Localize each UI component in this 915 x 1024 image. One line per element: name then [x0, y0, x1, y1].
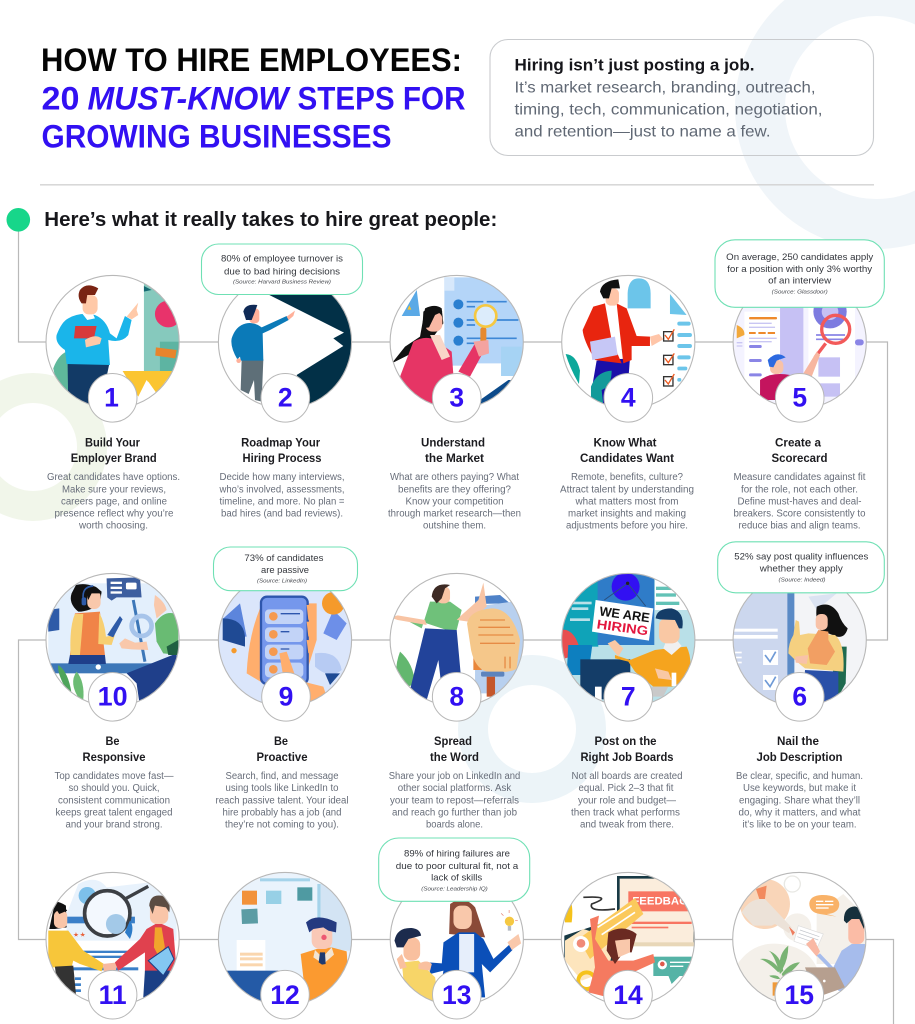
number badge: 8: [449, 682, 464, 712]
step description: reach passive talent. Your ideal: [216, 796, 348, 806]
step description: what matters most from: [574, 496, 678, 508]
step 3 panel: [388, 273, 525, 532]
callout: candidates per position: of an interview: [768, 276, 831, 286]
illustration: hand holding phone of candidates: [219, 591, 351, 702]
step description: bad hires (and bad reviews).: [221, 508, 343, 520]
illustration: we are hiring sign: HIRING: [596, 616, 649, 638]
step 10 panel: [43, 572, 183, 830]
title: 20: [42, 80, 80, 116]
step description: [47, 472, 180, 532]
number badge: [432, 672, 481, 721]
step 2 panel: [202, 244, 362, 520]
step description: Measure candidates against fit: [734, 472, 866, 483]
illustration: man at sticky note board: [219, 873, 351, 1000]
number badge: 3: [449, 382, 464, 412]
step description: it’s like to be on your team.: [742, 820, 856, 830]
step description: [54, 771, 174, 830]
section heading: Here’s what it really takes to hire great people:: [44, 209, 497, 231]
step description: Know your competition: [406, 496, 504, 508]
step description: [571, 771, 682, 830]
step description: equal. Pick 2–3 that fit: [578, 783, 674, 794]
number badge: 6: [792, 682, 807, 712]
callout: candidates per position: [715, 240, 884, 307]
step 11 panel: [43, 871, 183, 1019]
callout: passive candidates: are passive: [261, 565, 309, 576]
step description: adjustments before you hire.: [566, 520, 688, 532]
step description: Great candidates have options.: [47, 472, 180, 483]
step title: Job Description: [756, 751, 842, 764]
illustration: presenter with charts: [53, 284, 179, 404]
step description: Search, find, and message: [226, 771, 338, 782]
number badge: [432, 970, 481, 1019]
illustration: feedback screen and woman: FEEDBAC: [632, 896, 688, 908]
illustration: feedback screen and woman: [564, 876, 694, 996]
illustration: we are hiring sign: [562, 574, 694, 702]
callout: post quality: (Source: Indeed): [778, 578, 826, 584]
step description: your team to repost—referrals: [390, 796, 519, 806]
step description: then track what performs: [571, 808, 680, 818]
step title: [756, 735, 842, 764]
number badge: [775, 374, 824, 422]
illustration: reviewing resume with laptop: [738, 876, 866, 1000]
title: STEPS FOR: [298, 80, 466, 116]
number badge: [604, 672, 653, 721]
step 6 panel: [718, 542, 884, 830]
intro box: and retention—just to name a few.: [514, 123, 770, 140]
step description: your role and budget—: [578, 796, 676, 806]
background ring: center: [473, 670, 591, 788]
step description: [734, 472, 866, 532]
step description: Decide how many interviews,: [220, 472, 344, 483]
step description: using tools like LinkedIn to: [226, 783, 338, 794]
step 15 panel: [730, 871, 870, 1019]
step description: [216, 771, 348, 830]
callout: turnover stat: due to bad hiring decisions: [224, 266, 340, 277]
number badge: [432, 374, 481, 422]
step description: Share your job on LinkedIn and: [389, 771, 520, 782]
number badge: 10: [98, 682, 128, 712]
step description: and tweak from there.: [580, 820, 674, 830]
number badge: [88, 970, 137, 1019]
number badge: [88, 374, 137, 422]
number badge: 12: [270, 980, 300, 1010]
step title: Proactive: [256, 751, 308, 764]
illustration: woman speaking at microphone: [394, 582, 523, 701]
step title: [772, 436, 828, 465]
step description: [560, 472, 694, 532]
step description: boards alone.: [426, 820, 483, 830]
step title: Scorecard: [772, 452, 828, 465]
step title: Post on the: [594, 735, 657, 748]
step description: through market research—then: [388, 508, 521, 520]
number badge: [88, 672, 137, 721]
step description: [736, 771, 863, 830]
step title: Candidates Want: [580, 452, 674, 465]
step title: Create a: [775, 436, 822, 450]
illustration: we are hiring sign: WE ARE: [599, 603, 651, 625]
step description: Be clear, specific, and human.: [736, 771, 863, 782]
step title: Build Your: [85, 436, 140, 450]
step 5 panel: [715, 240, 884, 532]
background ring: left: [0, 388, 92, 506]
number badge: [604, 374, 653, 422]
step description: so should you. Quick,: [68, 783, 160, 794]
step title: [580, 436, 674, 465]
step description: Use keywords, but make it: [743, 783, 856, 794]
step description: they’re not coming to you).: [225, 820, 339, 830]
illustration: woman with checklist and magnifier: [394, 277, 523, 404]
step 12 panel: [215, 871, 355, 1019]
step 7 panel: [558, 572, 698, 830]
intro box: Hiring isn’t just posting a job.: [514, 57, 754, 75]
callout: cultural fit: [379, 838, 530, 901]
step 4 panel: [558, 273, 698, 532]
number badge: 14: [613, 980, 643, 1010]
step 14 panel: [560, 871, 700, 1019]
callout: turnover stat: 80% of employee turnover is: [221, 253, 343, 264]
number badge: [604, 970, 652, 1019]
step description: Not all boards are created: [572, 771, 682, 782]
number badge: [261, 374, 310, 422]
step description: [388, 472, 521, 532]
step description: reduce bias and align teams.: [738, 520, 860, 532]
intro box: It’s market research, branding, outreach,: [514, 80, 816, 97]
step description: timeline, and more. No plan =: [220, 496, 345, 508]
callout: passive candidates: (Source: LinkedIn): [257, 578, 307, 584]
step description: who’s involved, assessments,: [219, 484, 344, 496]
number badge: 13: [442, 980, 472, 1010]
connector path: [18, 231, 894, 1024]
step description: Make sure your reviews,: [62, 484, 166, 496]
callout: cultural fit: due to poor cultural fit, not a: [396, 861, 519, 872]
step description: other social platforms. Ask: [398, 783, 511, 794]
step title: the Word: [430, 751, 479, 764]
step description: presence reflect why you’re: [54, 508, 174, 520]
step title: Responsive: [82, 751, 146, 764]
step description: do, why it matters, and what: [738, 808, 861, 818]
step description: consistent communication: [58, 796, 170, 806]
step title: Know What: [594, 436, 657, 450]
step title: Employer Brand: [71, 452, 157, 465]
number badge: [261, 970, 309, 1019]
title: [41, 42, 466, 154]
callout: candidates per position: On average, 250 candidates apply: [726, 252, 873, 263]
step title: Be: [106, 735, 120, 748]
callout: cultural fit: 89% of hiring failures are: [404, 848, 510, 859]
number badge: 11: [99, 980, 127, 1010]
step description: worth choosing.: [78, 520, 148, 532]
number badge: [262, 672, 310, 721]
intro box: [490, 40, 874, 156]
step description: and reach go further than job: [392, 808, 517, 818]
illustration: scanning resume with magnifier: [734, 308, 866, 403]
step title: Right Job Boards: [580, 751, 674, 764]
number badge: 4: [621, 382, 636, 412]
number badge: 7: [621, 682, 636, 712]
step title: the Market: [425, 452, 484, 465]
callout: cultural fit: lack of skills: [431, 873, 482, 884]
callout: candidates per position: (Source: Glassdoor): [772, 290, 828, 296]
step description: careers page, and online: [61, 496, 167, 508]
step 9 panel: [213, 547, 358, 830]
start dot: [6, 208, 30, 232]
callout: turnover stat: (Source: Harvard Business Review): [233, 280, 331, 286]
number badge: 2: [278, 382, 293, 412]
background ring: top right: [760, 0, 915, 224]
illustration: recruiter headset conversation: [48, 578, 178, 700]
step description: What are others paying? What: [390, 472, 519, 483]
callout: passive candidates: 73% of candidates: [244, 553, 324, 564]
step description: breakers. Score consistently to: [734, 508, 866, 520]
intro box: timing, tech, communication, negotiation,: [514, 102, 822, 119]
step title: [71, 436, 157, 465]
step description: Attract talent by understanding: [560, 484, 694, 496]
callout: post quality: 52% say post quality influences: [734, 552, 869, 563]
step description: hire probably has a job (and: [222, 808, 342, 818]
step title: [256, 735, 308, 764]
illustration: handshake with magnifier: [48, 880, 176, 998]
number badge: 5: [792, 382, 807, 412]
number badge: 9: [279, 682, 293, 712]
step description: [219, 472, 345, 520]
step description: Remote, benefits, culture?: [571, 472, 684, 483]
step title: Be: [274, 735, 289, 748]
number badge: [775, 970, 824, 1019]
step description: and your brand strong.: [66, 820, 162, 830]
illustration: woman by job description board: [734, 593, 866, 702]
callout: passive candidates: [214, 547, 358, 591]
callout: turnover stat: [202, 244, 362, 294]
step title: [580, 735, 674, 764]
step 1 panel: [43, 273, 184, 532]
step description: market insights and making: [568, 508, 686, 520]
step 8 panel: [388, 572, 525, 830]
illustration: man at roadmap arrow: [231, 295, 352, 404]
step title: Roadmap Your: [241, 436, 321, 450]
step description: benefits are they offering?: [398, 484, 512, 496]
step description: engaging. Share what they’ll: [739, 796, 860, 806]
callout: candidates per position: for a position with only 3% worthy: [727, 264, 872, 275]
step title: [430, 735, 479, 764]
step title: Understand: [421, 436, 485, 450]
step description: [389, 771, 520, 830]
callout: post quality: [718, 542, 884, 593]
callout: post quality: whether they apply: [759, 564, 843, 575]
step description: for the role, not each other.: [741, 484, 858, 496]
step description: outshine them.: [423, 520, 486, 532]
step title: [421, 436, 485, 465]
illustration: man reviewing checklist: [566, 278, 692, 404]
step description: Top candidates move fast—: [54, 771, 174, 782]
number badge: 15: [785, 980, 814, 1010]
number badge: 1: [104, 382, 119, 412]
title: GROWING BUSINESSES: [42, 118, 392, 154]
number badge: [775, 672, 824, 721]
callout: cultural fit: (Source: Leadership IQ): [421, 886, 488, 892]
step title: Hiring Process: [242, 452, 322, 465]
step title: Spread: [434, 735, 472, 748]
step description: Define must-haves and deal-: [738, 496, 862, 508]
title: MUST-KNOW: [88, 80, 291, 116]
step title: [241, 436, 322, 465]
step 13 panel: [379, 838, 530, 1019]
title: HOW TO HIRE EMPLOYEES:: [41, 42, 462, 78]
step title: Nail the: [777, 735, 820, 748]
step title: [82, 735, 146, 764]
step description: keeps great talent engaged: [56, 808, 172, 818]
illustration: woman and boy with lightbulb idea: [394, 902, 522, 1000]
